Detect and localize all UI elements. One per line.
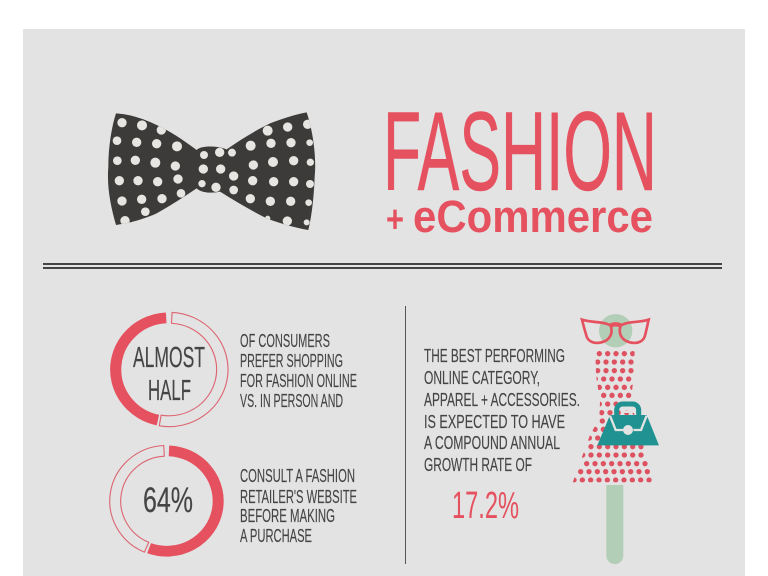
text: consult a fashion retailer — [240, 466, 357, 546]
polka dot dress — [574, 354, 657, 480]
icon: fashion figure — [574, 314, 659, 564]
text: best performing category: ONLINE CATEGORY, — [424, 368, 540, 388]
glasses — [582, 320, 649, 343]
text: of consumers: OF CONSUMERS — [240, 331, 330, 351]
text: best performing category — [424, 346, 580, 475]
text: of consumers: FOR FASHION ONLINE — [240, 371, 357, 391]
icon: polka dot bow tie — [108, 112, 315, 230]
text: of consumers — [240, 331, 357, 411]
text: best performing category: APPAREL + ACCESSORIES. — [424, 390, 580, 410]
statistic: 17.2%: 17.2% — [452, 485, 519, 527]
subtitle: + — [386, 199, 404, 241]
text: consult a fashion retailer: CONSULT A FASHION — [240, 466, 355, 486]
text: best performing category: GROWTH RATE OF — [424, 455, 532, 475]
title — [383, 89, 657, 242]
text: consult a fashion retailer: BEFORE MAKING — [240, 506, 335, 526]
text: best performing category: IS EXPECTED TO HAVE — [424, 412, 565, 432]
text: best performing category: A COMPOUND ANNUAL — [424, 433, 560, 453]
ring: almost half: ALMOST — [133, 342, 205, 374]
figure head and leg — [599, 314, 632, 564]
handbag — [597, 404, 659, 445]
subtitle: eCommerce — [413, 191, 653, 242]
text: of consumers: VS. IN PERSON AND — [240, 391, 343, 411]
ring: almost half — [116, 312, 228, 427]
text: of consumers: PREFER SHOPPING — [240, 351, 343, 371]
ring: almost half: HALF — [148, 375, 191, 407]
text: best performing category: THE BEST PERFORMING — [424, 346, 565, 366]
ring: 64%: 64% — [143, 481, 193, 520]
text: consult a fashion retailer: RETAILER'S WEBSITE — [240, 487, 357, 507]
text: consult a fashion retailer: A PURCHASE — [240, 526, 312, 546]
ring: 64% — [110, 446, 218, 552]
